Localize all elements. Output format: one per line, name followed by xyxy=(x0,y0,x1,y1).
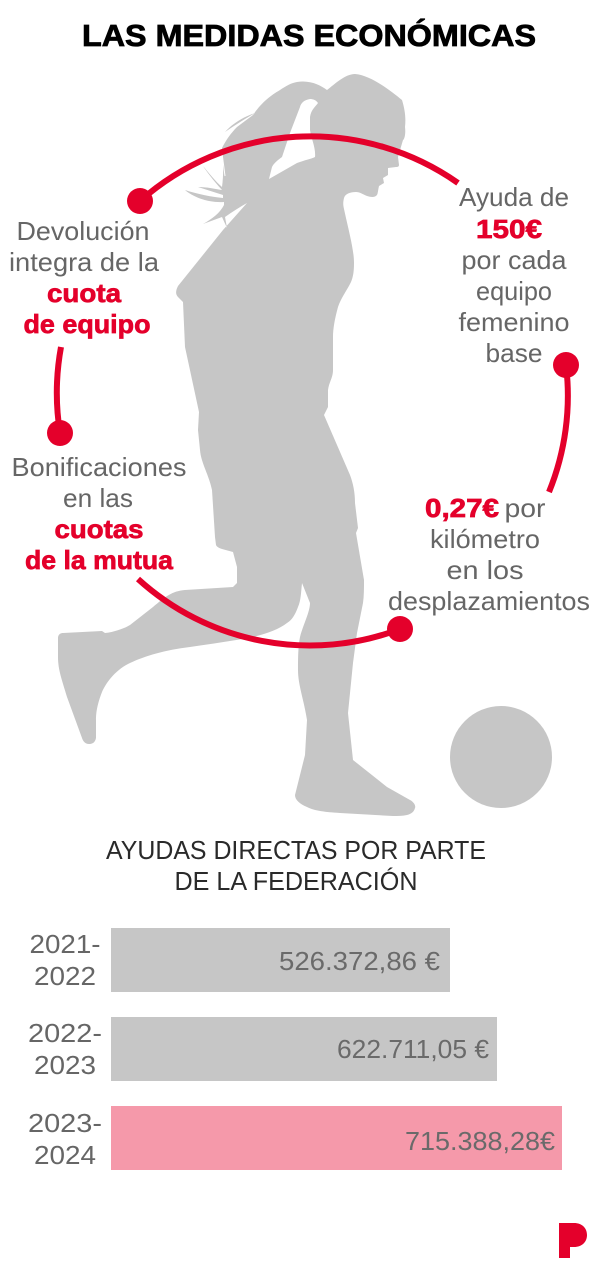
logo xyxy=(559,1223,587,1258)
title: LAS MEDIDAS ECONÓMICAS xyxy=(82,17,536,53)
bar 2022-2023: 2023 xyxy=(34,1050,96,1080)
bar 2021-2022 xyxy=(30,928,450,992)
text: bonificaciones: Bonificaciones xyxy=(12,452,186,482)
arc connector: cuota de equipo to 150 euros xyxy=(127,136,458,214)
text: devolucion integra xyxy=(9,216,160,339)
bar 2021-2022: 526.372,86 € xyxy=(279,946,441,976)
bar 2023-2024: 715.388,28€ xyxy=(405,1126,556,1156)
text: kilometre rate: 0,27€ xyxy=(425,493,499,523)
text: bonificaciones: de la mutua xyxy=(25,545,174,575)
text: kilometre rate: kilómetro xyxy=(430,524,540,554)
text: devolucion integra: Devolución xyxy=(16,216,150,246)
bar 2021-2022: 2021- xyxy=(30,929,100,959)
text: kilometre rate: en los xyxy=(446,555,524,585)
bar chart xyxy=(28,928,562,1170)
text: bonificaciones: en las xyxy=(63,483,133,513)
arc connector: kilometre to mutua xyxy=(138,579,413,646)
text: bonificaciones xyxy=(12,452,186,575)
bar 2021-2022: 2022 xyxy=(34,961,96,991)
text: kilometre rate: por xyxy=(504,493,546,523)
bar 2022-2023: 2022- xyxy=(28,1018,102,1048)
bar 2023-2024: 2023- xyxy=(28,1108,102,1138)
text: ayuda 150 euros: Ayuda de xyxy=(459,182,569,212)
text: ayuda 150 euros: equipo xyxy=(476,276,552,306)
text: devolucion integra: cuota xyxy=(47,278,122,308)
text: ayuda 150 euros: 150€ xyxy=(476,214,542,244)
silhouette: female football player xyxy=(58,74,415,816)
text: kilometre rate xyxy=(388,493,590,616)
chart heading: DE LA FEDERACIÓN xyxy=(174,866,418,896)
text: bonificaciones: cuotas xyxy=(54,514,144,544)
arc connector: mutua to cuota de equipo xyxy=(47,347,73,446)
text: ayuda 150 euros xyxy=(458,182,570,368)
ball xyxy=(450,706,552,808)
bar 2023-2024: 2024 xyxy=(34,1140,96,1170)
bar 2023-2024 xyxy=(28,1106,562,1170)
text: devolucion integra: de equipo xyxy=(24,309,150,339)
arc connector: 150 euros to kilometre xyxy=(549,352,579,492)
text: ayuda 150 euros: femenino xyxy=(458,307,570,337)
text: devolucion integra: integra de la xyxy=(9,247,160,277)
text: ayuda 150 euros: base xyxy=(486,338,542,368)
chart heading xyxy=(106,835,486,896)
text: ayuda 150 euros: por cada xyxy=(462,245,567,275)
bar 2022-2023: 622.711,05 € xyxy=(337,1034,490,1064)
bar 2022-2023 xyxy=(28,1017,497,1081)
chart heading: AYUDAS DIRECTAS POR PARTE xyxy=(106,835,486,865)
text: kilometre rate: desplazamientos xyxy=(388,586,590,616)
